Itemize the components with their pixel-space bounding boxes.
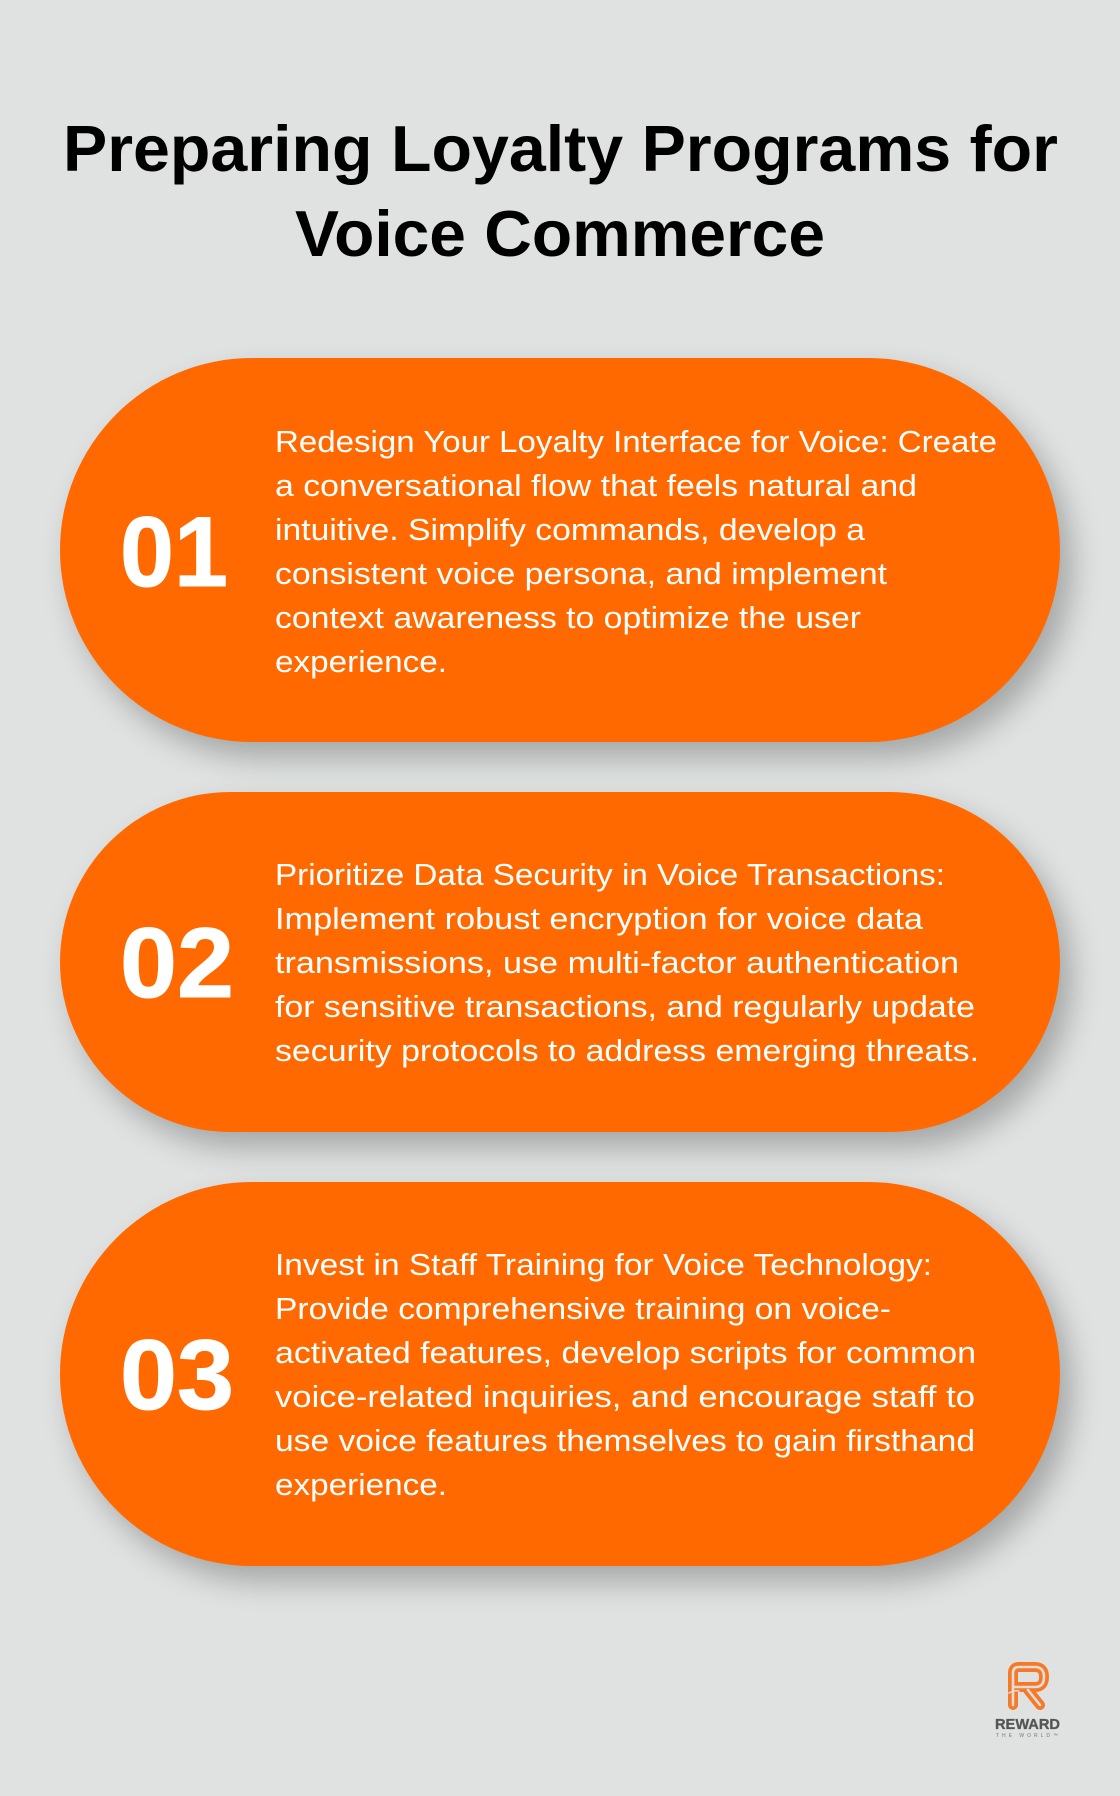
pill panel: step 1 <box>60 358 1060 742</box>
text block: step 2: for sensitive transactions, and regularly update <box>275 989 975 1024</box>
pill panel: step 2 <box>60 792 1060 1132</box>
text block: step 3: activated features, develop scripts for common <box>275 1335 976 1370</box>
pill panel: step 3 <box>60 1182 1060 1566</box>
title: Voice Commerce <box>295 197 825 270</box>
number 01: 01 <box>120 496 228 607</box>
text block: step 3: use voice features themselves to gain firsthand <box>275 1423 975 1458</box>
text block: step 3: Provide comprehensive training on voice- <box>275 1291 891 1326</box>
title: Preparing Loyalty Programs for <box>63 112 1058 185</box>
number 02: 02 <box>120 907 234 1018</box>
text block: step 1: consistent voice persona, and implement <box>275 556 887 591</box>
text block: step 3: voice-related inquiries, and encourage staff to <box>275 1379 975 1414</box>
text block: step 2 <box>275 857 979 1068</box>
title <box>63 112 1058 270</box>
number 03: 03 <box>120 1319 234 1430</box>
icon: stylised R <box>1009 1667 1044 1705</box>
text block: step 3 <box>275 1247 976 1502</box>
logo wordmark: REWARD <box>995 1717 1060 1733</box>
text block: step 1 <box>275 424 997 679</box>
text block: step 1: Redesign Your Loyalty Interface for Voice: Create <box>275 424 997 459</box>
logo: Reward the World <box>995 1667 1060 1739</box>
text block: step 1: experience. <box>275 644 447 679</box>
text block: step 3: experience. <box>275 1467 447 1502</box>
text block: step 1: context awareness to optimize the user <box>275 600 861 635</box>
text block: step 1: intuitive. Simplify commands, develop a <box>275 512 866 547</box>
logo tagline: THE WORLD™ <box>996 1733 1058 1739</box>
text block: step 2: transmissions, use multi-factor authentication <box>275 945 959 980</box>
text block: step 2: Implement robust encryption for voice data <box>275 901 924 936</box>
text block: step 3: Invest in Staff Training for Voice Technology: <box>275 1247 932 1282</box>
text block: step 1: a conversational flow that feels natural and <box>275 468 917 503</box>
text block: step 2: Prioritize Data Security in Voice Transactions: <box>275 857 945 892</box>
text block: step 2: security protocols to address emerging threats. <box>275 1033 979 1068</box>
